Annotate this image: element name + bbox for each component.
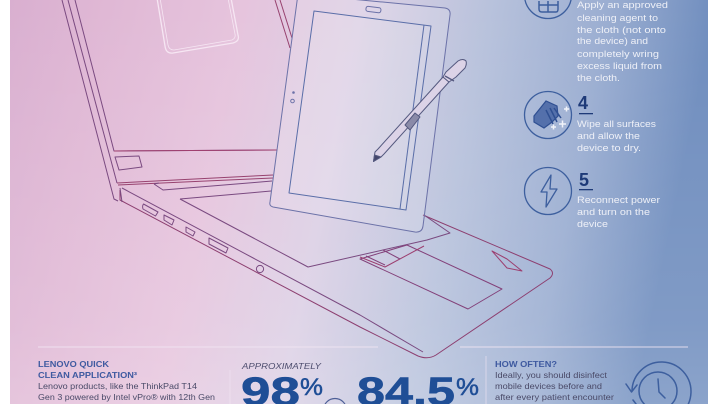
body text: Gen 3 powered by Intel vPro® with 12th Gen	[38, 392, 215, 402]
icon: spray cloth circle	[524, 0, 572, 18]
step 3 text: the cloth (not onto	[577, 25, 666, 35]
step 3: cleaning agent	[524, 0, 668, 83]
heading: CLEAN APPLICATION³	[38, 370, 137, 380]
step 3 text	[577, 0, 668, 83]
step 4: wipe surfaces	[524, 92, 657, 153]
tablet side dots	[291, 92, 294, 103]
laptop touchpad	[360, 245, 522, 309]
tablet screen inner edge	[400, 25, 424, 209]
tablet screen	[289, 11, 431, 210]
stylus pen	[374, 60, 466, 162]
step 3 text: Apply an approved	[577, 0, 668, 10]
step 4 text	[577, 119, 657, 153]
panel: Lenovo Quick Clean application	[38, 359, 215, 402]
step 3 text: the cloth.	[577, 73, 620, 83]
body text	[38, 381, 215, 402]
stat: 98 percent: %	[300, 374, 323, 401]
icon: hand wiping with sparkles	[524, 92, 572, 138]
icon: clock with return arrow	[626, 362, 691, 404]
stat: 84.5 percent: %	[456, 374, 479, 401]
icon: circle between stats	[324, 398, 346, 404]
heading: LENOVO QUICK	[38, 359, 110, 369]
step 5 text: device	[577, 219, 608, 229]
step 5 text: and turn on the	[577, 207, 650, 217]
label: approximately: APPROXIMATELY	[241, 361, 322, 371]
laptop base and side ports	[120, 188, 552, 358]
body text: mobile devices before and	[495, 381, 602, 391]
body text: Lenovo products, like the ThinkPad T14	[38, 381, 197, 391]
icon: lightning bolt	[524, 168, 572, 214]
laptop keyboard hinge	[154, 181, 272, 199]
body text	[495, 370, 614, 402]
step 3 text: excess liquid from	[577, 61, 662, 71]
tablet illustration	[270, 0, 450, 232]
body text: Ideally, you should disinfect	[495, 370, 608, 380]
tablet home button	[366, 6, 381, 13]
step 4 text: and allow the	[577, 131, 640, 141]
step 3 text: cleaning agent to	[577, 13, 658, 23]
panel: statistics	[241, 361, 479, 404]
bottom section divider	[38, 347, 688, 404]
step 5: reconnect power	[524, 168, 660, 229]
stat: 84.5 percent	[357, 370, 479, 404]
step number 5: 5	[579, 170, 589, 190]
heading: HOW OFTEN?	[495, 359, 557, 369]
step 4 text: Wipe all surfaces	[577, 119, 657, 129]
step 4 text: device to dry.	[577, 143, 641, 153]
laptop lid	[62, 0, 292, 201]
step 3 text: the device) and	[577, 36, 648, 46]
tablet body	[270, 0, 450, 232]
step number 4: 4	[578, 93, 588, 113]
panel: how often	[495, 359, 691, 404]
stat: 98 percent	[241, 370, 323, 404]
body text: after every patient encounter	[495, 392, 614, 402]
step 5 text: Reconnect power	[577, 195, 660, 205]
laptop illustration	[62, 0, 552, 358]
ghost phone outline on laptop lid	[157, 0, 238, 53]
step 5 text	[577, 195, 660, 229]
heading	[38, 359, 137, 380]
step 3 text: completely wring	[577, 49, 659, 59]
